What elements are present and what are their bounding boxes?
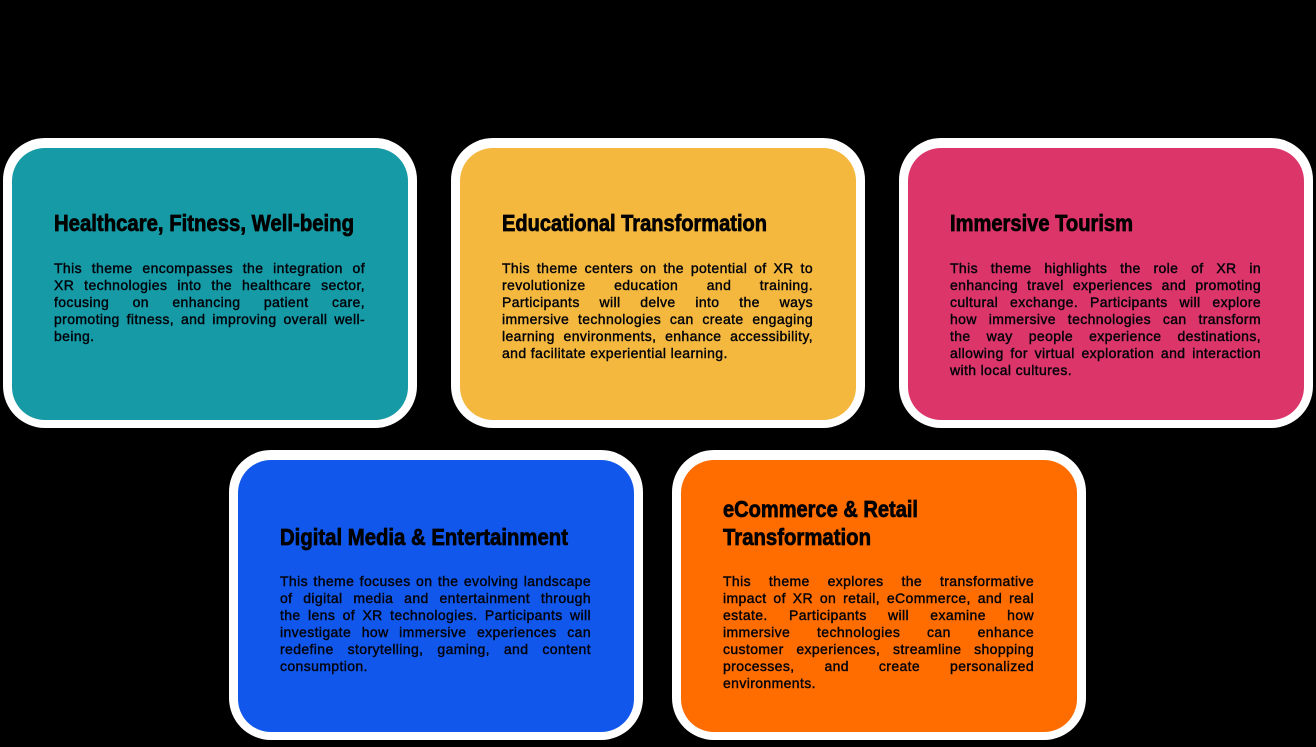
text: eCommerce description: estate. Participants will examine how	[723, 607, 1034, 623]
text: tourism description: how immersive technologies can transform	[950, 311, 1261, 327]
text: tourism description: enhancing travel experiences and promoting	[950, 277, 1261, 293]
panel: Immersive Tourism	[899, 138, 1313, 428]
panel: eCommerce & Retail Transformation	[672, 450, 1086, 740]
text: education description: learning environments, enhance accessibility,	[502, 328, 813, 344]
panel: Healthcare, Fitness, Well-being	[3, 138, 417, 428]
text: digital media description: consumption.	[280, 658, 368, 674]
text: education description: and facilitate experiential learning.	[502, 345, 728, 361]
heading: eCommerce & Retail Transformation	[722, 496, 918, 550]
heading: Educational Transformation: Educational Transformation	[502, 210, 767, 236]
heading: eCommerce & Retail Transformation: eCommerce & Retail	[723, 496, 918, 522]
text: education description: immersive technologies can create engaging	[502, 311, 813, 327]
text: digital media description	[280, 573, 591, 674]
text: healthcare description	[54, 260, 365, 344]
text: digital media description: redefine storytelling, gaming, and content	[280, 641, 591, 657]
text: eCommerce description: customer experiences, streamline shopping	[723, 641, 1034, 657]
text: tourism description: This theme highlights the role of XR in	[950, 260, 1261, 276]
heading: Digital Media & Entertainment: Digital Media & Entertainment	[280, 524, 568, 550]
text: eCommerce description: impact of XR on retail, eCommerce, and real	[723, 590, 1034, 606]
panel: Educational Transformation	[451, 138, 865, 428]
text: digital media description: the lens of XR technologies. Participants will	[280, 607, 591, 623]
text: healthcare description: This theme encompasses the integration of	[54, 260, 365, 276]
text: tourism description: with local cultures.	[950, 362, 1072, 378]
text: healthcare description: being.	[54, 328, 94, 344]
text: eCommerce description: This theme explores the transformative	[723, 573, 1034, 589]
text: eCommerce description: immersive technologies can enhance	[723, 624, 1034, 640]
text: tourism description: the way people experience destinations,	[950, 328, 1261, 344]
text: digital media description: investigate how immersive experiences can	[280, 624, 591, 640]
text: healthcare description: focusing on enhancing patient care,	[54, 294, 365, 310]
text: healthcare description: XR technologies into the healthcare sector,	[54, 277, 365, 293]
text: tourism description: allowing for virtual exploration and interaction	[950, 345, 1261, 361]
heading: eCommerce & Retail Transformation: Transformation	[723, 524, 871, 550]
panel: Digital Media & Entertainment	[229, 450, 643, 740]
heading: Healthcare, Fitness, Well-being: Healthcare, Fitness, Well-being	[54, 210, 354, 236]
text: education description: Participants will delve into the ways	[502, 294, 813, 310]
text: healthcare description: promoting fitness, and improving overall well-	[54, 311, 365, 327]
text: digital media description: This theme focuses on the evolving landscape	[280, 573, 591, 589]
text: eCommerce description	[723, 573, 1034, 691]
text: education description	[502, 260, 813, 362]
text: eCommerce description: processes, and create personalized	[723, 658, 1034, 674]
text: education description: This theme centers on the potential of XR to	[502, 260, 813, 276]
text: tourism description	[950, 260, 1261, 378]
heading: Immersive Tourism: Immersive Tourism	[950, 210, 1133, 236]
text: eCommerce description: environments.	[723, 675, 816, 691]
text: tourism description: cultural exchange. Participants will explore	[950, 294, 1261, 310]
text: digital media description: of digital media and entertainment through	[280, 590, 591, 606]
text: education description: revolutionize education and training.	[502, 277, 813, 293]
